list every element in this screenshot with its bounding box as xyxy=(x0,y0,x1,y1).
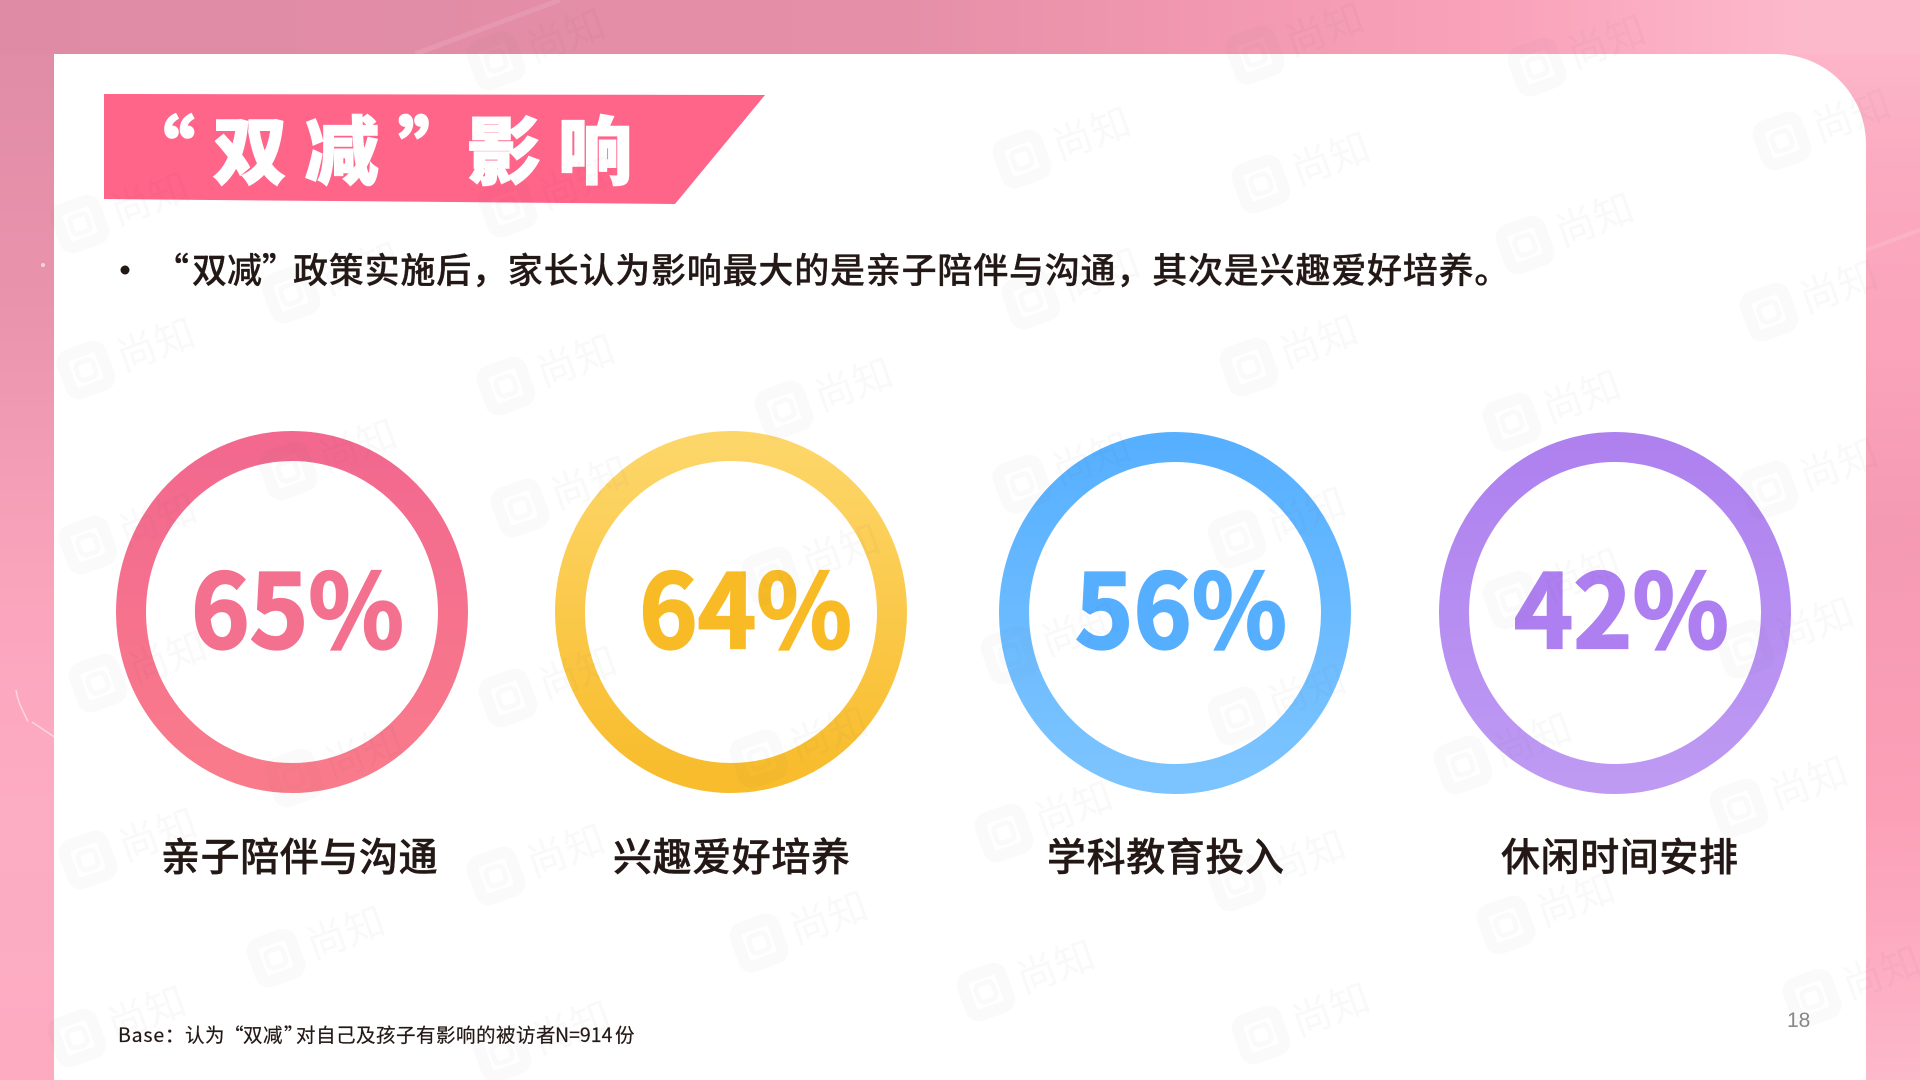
ring 64 xyxy=(570,446,892,778)
bullet summary: “双减” xyxy=(154,243,297,294)
metric: 42% leisure arrangement xyxy=(1454,447,1776,883)
base footnote: 认为 xyxy=(185,1019,225,1048)
metric: 65% parent-child companionship xyxy=(131,446,453,883)
metric: 64% interest cultivation xyxy=(570,446,892,883)
base footnote: 双减 xyxy=(243,1019,283,1048)
base footnote: 份 xyxy=(615,1019,635,1048)
title text: “双减”影响 xyxy=(121,93,632,200)
metric: 56% academic investment xyxy=(1014,447,1336,883)
title banner xyxy=(104,93,765,204)
ring 42 xyxy=(1454,447,1776,779)
label 兴趣爱好培养: 兴趣爱好培养 xyxy=(613,827,851,883)
base footnote: Base： xyxy=(118,1019,185,1048)
value 65%: 65% xyxy=(191,531,404,678)
label 学科教育投入: 学科教育投入 xyxy=(1047,827,1285,883)
base footnote: ” xyxy=(284,1019,304,1048)
ring 56 xyxy=(1014,447,1336,779)
value 56%: 56% xyxy=(1075,531,1287,678)
base footnote: 对自己及孩子有影响的被访者 xyxy=(296,1019,556,1048)
label 休闲时间安排: 休闲时间安排 xyxy=(1501,827,1739,883)
value 42%: 42% xyxy=(1514,531,1729,678)
bullet summary: 政策实施后，家长认为影响最大的是亲子陪伴与沟通，其次是兴趣爱好培养。 xyxy=(293,243,1510,294)
label 亲子陪伴与沟通: 亲子陪伴与沟通 xyxy=(161,827,438,883)
base footnote: N=914 xyxy=(555,1019,613,1048)
value 64%: 64% xyxy=(639,531,852,678)
base footnote: “ xyxy=(224,1019,244,1048)
page number: 18 xyxy=(1787,1009,1810,1032)
ring 65 xyxy=(131,446,453,778)
